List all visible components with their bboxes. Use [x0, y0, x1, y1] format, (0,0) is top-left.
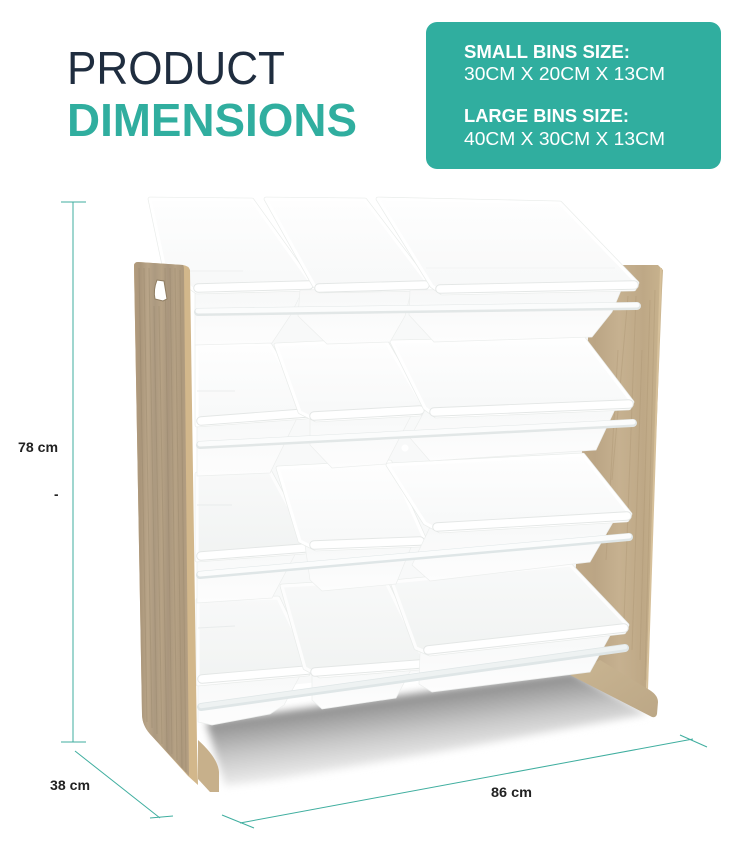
- floor shadow: [206, 672, 648, 786]
- bin: row 3 left: [197, 472, 309, 603]
- small bins size: [464, 42, 665, 84]
- screw hole: [402, 444, 408, 452]
- bin: row 1 left: [150, 199, 312, 345]
- bins: third row: [197, 455, 630, 603]
- panel: bin sizes: [426, 22, 721, 169]
- bins: bottom row: [198, 565, 627, 725]
- dimension: height: [18, 202, 86, 742]
- bin: row 4 middle: [282, 580, 424, 709]
- right foot: [570, 660, 658, 717]
- bin: row 2 middle: [276, 340, 424, 468]
- label: 78 cm: 78 cm: [18, 440, 58, 455]
- bin: row 4 right: [392, 565, 627, 692]
- rod: row 3: [200, 536, 629, 575]
- bin: row 2 left: [197, 345, 309, 476]
- bin: row 3 middle: [278, 462, 424, 591]
- dimension: depth: [50, 751, 173, 818]
- label: 86 cm: 86 cm: [491, 785, 532, 800]
- title line: PRODUCT: PRODUCT: [67, 42, 285, 94]
- small bins size: 30CM X 20CM X 13CM: [464, 64, 665, 84]
- label: 38 cm: 38 cm: [50, 778, 90, 793]
- dimension: width: [222, 735, 707, 828]
- bin: row 4 left: [198, 598, 311, 725]
- bin backdrop: [196, 300, 590, 694]
- bins: top row: [150, 199, 637, 345]
- large bins size: LARGE BINS SIZE:: [464, 106, 629, 126]
- right wood side panel: [566, 265, 663, 717]
- title line: DIMENSIONS: DIMENSIONS: [67, 94, 357, 146]
- large bins size: [464, 106, 665, 149]
- rod: row 1: [198, 305, 637, 312]
- left foot: [198, 740, 219, 792]
- small bins size: SMALL BINS SIZE:: [464, 42, 630, 62]
- handle hole: [154, 280, 167, 301]
- rod: row 4: [201, 647, 625, 707]
- bins: second row: [197, 338, 633, 476]
- left wood side panel: [134, 262, 219, 792]
- large bins size: 40CM X 30CM X 13CM: [464, 129, 665, 149]
- rod: row 2: [200, 422, 633, 445]
- title: [67, 42, 357, 146]
- bin: row 2 right: [392, 338, 632, 461]
- bin: row 3 right: [388, 455, 630, 581]
- bin: row 1 middle: [266, 199, 428, 344]
- stray dash: -: [54, 487, 58, 502]
- bin: row 1 right: [378, 199, 637, 342]
